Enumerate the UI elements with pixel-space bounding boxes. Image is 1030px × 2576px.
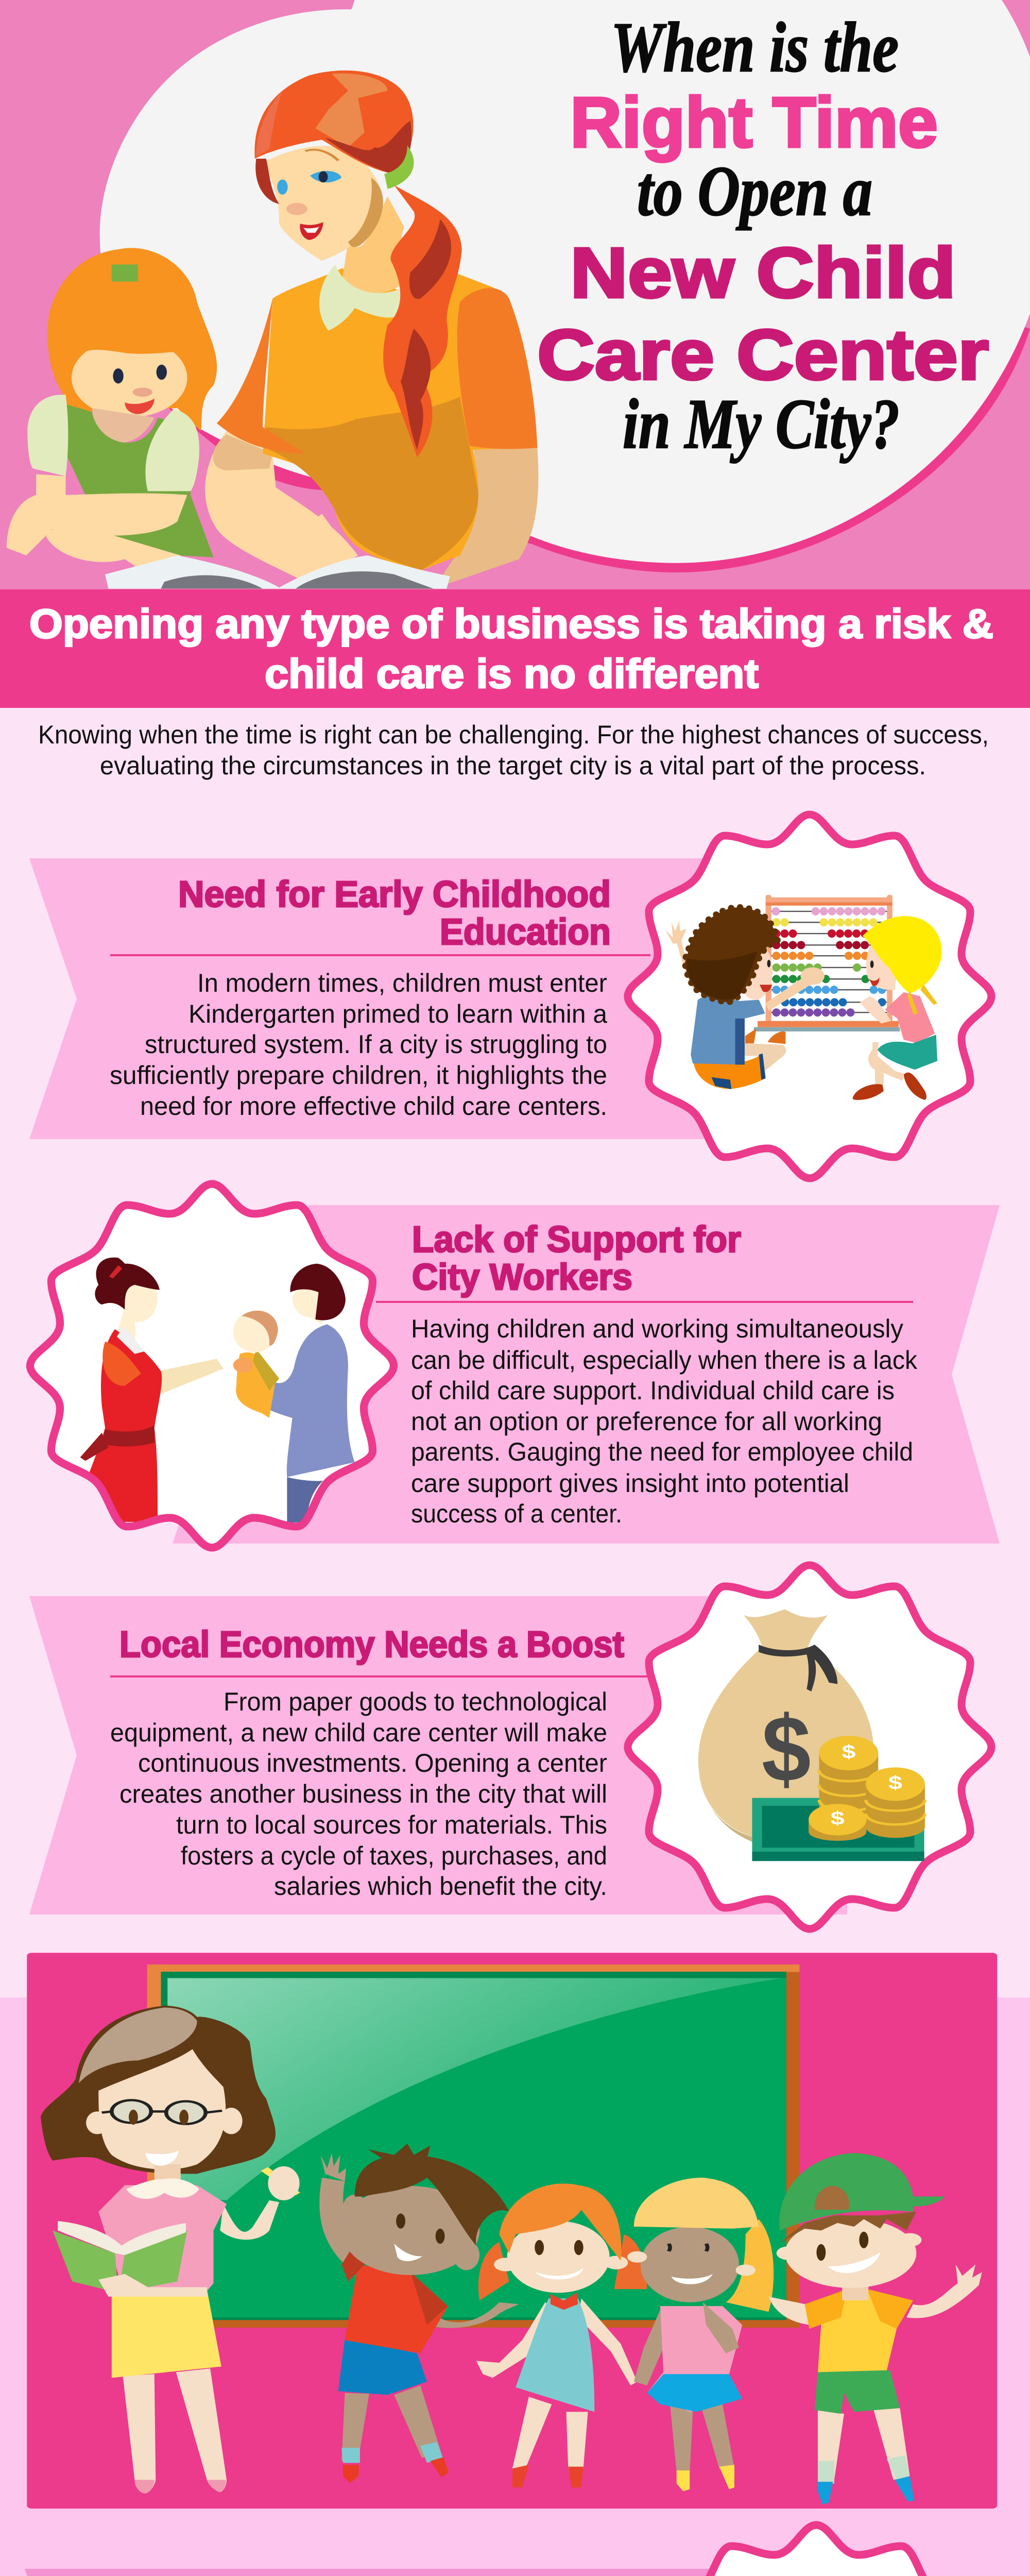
title line: Care Center: Care Center: [537, 315, 989, 395]
title line: Right Time: Right Time: [570, 83, 938, 162]
badge with children at abacus: [628, 815, 991, 1178]
body text: Kindergarten primed to learn within a: [188, 999, 607, 1028]
heading: [412, 1219, 741, 1298]
title line: New Child: New Child: [570, 233, 956, 313]
open book: [105, 555, 450, 589]
baby: [233, 1311, 279, 1418]
ribbon: [29, 1596, 847, 1914]
panel: classroom illustration: [27, 1953, 997, 2509]
body text: need for more effective child care centers.: [140, 1092, 607, 1121]
girl with orange hair: [476, 2183, 647, 2487]
body text: structured system. If a city is struggling to: [145, 1030, 607, 1059]
badge with teacher and two girls: [634, 2525, 998, 2576]
headline banner: [0, 589, 1030, 708]
banknote: [752, 1798, 924, 1861]
white oval: [100, 0, 1030, 563]
heading: Need for Early Childhood: [178, 874, 611, 915]
badge with two women and baby: [30, 1184, 393, 1548]
coins: $: [842, 1741, 856, 1762]
body text: continuous investments. Opening a center: [138, 1749, 607, 1777]
body text: [110, 1687, 607, 1901]
panel: demand for specific type of child care: [25, 2525, 998, 2576]
title line: to Open a: to Open a: [637, 151, 872, 230]
intro text: Knowing when the time is right can be challenging. For the highest chances of success,: [38, 720, 989, 749]
body text: sufficiently prepare children, it highlights the: [110, 1061, 607, 1090]
heading: Education: [440, 912, 611, 953]
body text: not an option or preference for all working: [411, 1407, 882, 1436]
badge with money bag: [628, 1565, 991, 1929]
coins: [809, 1736, 925, 1841]
coins: $: [888, 1772, 902, 1793]
heading: [178, 874, 611, 953]
teacher's book: [53, 2221, 187, 2293]
headline banner: child care is no different: [265, 651, 759, 697]
boy in red shirt: [319, 2144, 519, 2483]
body text: [110, 969, 607, 1121]
child: [7, 248, 217, 586]
headline banner: Opening any type of business is taking a risk &: [29, 601, 993, 647]
title line: When is the: When is the: [611, 8, 899, 87]
body text: of child care support. Individual child care is: [411, 1376, 895, 1405]
heading: City Workers: [412, 1257, 632, 1298]
body text: In modern times, children must enter: [197, 969, 607, 997]
boy in green cap: [768, 2153, 982, 2504]
intro text: [38, 720, 989, 780]
intro text: evaluating the circumstances in the target city is a vital part of the process.: [100, 751, 926, 780]
teacher: [41, 2006, 300, 2494]
body text: success of a center.: [411, 1499, 622, 1528]
heading: Lack of Support for: [412, 1219, 741, 1260]
panel: local economy needs a boost: [29, 1565, 991, 1929]
title: [537, 8, 989, 463]
body text: [411, 1314, 918, 1528]
body text: parents. Gauging the need for employee child: [411, 1437, 913, 1466]
money bag: [698, 1609, 873, 1842]
oval pink rim: [100, 189, 1030, 572]
girl with blonde hair: [627, 2178, 774, 2491]
ribbon: [173, 1205, 1000, 1544]
dollar sign: $: [762, 1697, 811, 1801]
woman in blue holding baby: [240, 1264, 355, 1522]
boy: [665, 907, 825, 1089]
body text: salaries which benefit the city.: [274, 1872, 607, 1901]
abacus: [754, 895, 900, 1031]
heading: Local Economy Needs a Boost: [119, 1624, 624, 1665]
body text: care support gives insight into potential: [411, 1469, 849, 1498]
body text: fosters a cycle of taxes, purchases, and: [181, 1841, 607, 1870]
body text: turn to local sources for materials. This: [176, 1810, 607, 1839]
ribbon: [25, 2569, 721, 2576]
hero illustration: teacher and child on white oval: [7, 0, 1030, 589]
teacher: [205, 71, 538, 589]
body text: From paper goods to technological: [224, 1687, 607, 1716]
body text: creates another business in the city that will: [119, 1780, 607, 1808]
body text: Having children and working simultaneously: [411, 1314, 903, 1343]
girl: [852, 916, 942, 1100]
panel: need for early childhood education: [29, 815, 991, 1178]
woman in red: [80, 1258, 224, 1522]
chalkboard: [147, 1964, 799, 2328]
coins: $: [831, 1808, 845, 1829]
body text: can be difficult, especially when there is a lack: [411, 1346, 918, 1375]
body text: equipment, a new child care center will make: [110, 1718, 607, 1747]
title line: in My City?: in My City?: [623, 384, 900, 463]
ribbon: [29, 858, 721, 1139]
panel: lack of support for city workers: [30, 1184, 1000, 1548]
